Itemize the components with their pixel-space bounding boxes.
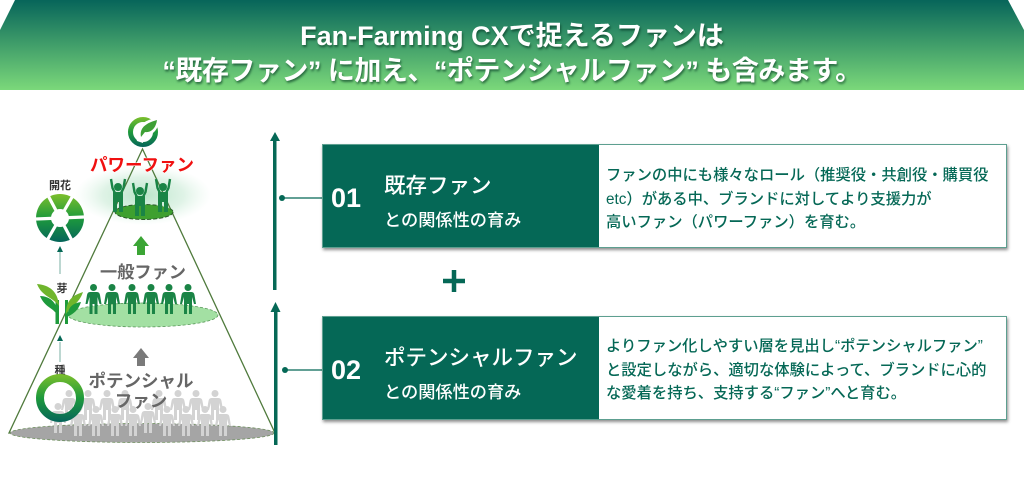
pyramid diagram	[8, 117, 322, 445]
potential fan people	[50, 390, 231, 436]
small arrow: seed to sprout	[57, 335, 63, 362]
label: potential fan: ポテンシャル	[88, 371, 194, 391]
label: bloom: 開花	[49, 178, 71, 192]
plus sign	[443, 270, 465, 292]
title: “既存ファン” に加え、“ポテンシャルファン” も含みます。	[162, 56, 862, 86]
card 02 body: と設定しながら、適切な体験によって、ブランドに心的	[606, 362, 986, 378]
power fan people	[111, 179, 170, 216]
icon: seed ring	[40, 378, 80, 418]
header banner	[0, 0, 1024, 90]
label: general fan: 一般ファン	[100, 262, 186, 282]
label: seed: 種	[54, 363, 66, 377]
glow	[75, 165, 211, 225]
card 01 body: etc）がある中、ブランドに対してより支援力が	[606, 190, 932, 208]
card 02	[322, 316, 1007, 420]
label: sprout: 芽	[56, 281, 68, 295]
card 02 heading panel	[323, 317, 599, 419]
gray arrow	[133, 348, 149, 366]
label: power fan: パワーファン	[90, 155, 194, 175]
card 02 body: よりファン化しやすい層を見出し“ポテンシャルファン”	[606, 338, 983, 355]
pyramid outline	[9, 149, 275, 433]
icon: sprout	[37, 284, 83, 324]
subheading 01: との関係性の育み	[384, 210, 521, 230]
card 01 body	[606, 166, 988, 231]
label: potential fan: ファン	[115, 391, 167, 411]
card 01 body: 高いファン（パワーファン）を育む。	[606, 214, 865, 231]
card 01 heading panel	[323, 145, 599, 247]
number 01: 01	[331, 183, 361, 213]
connector 2	[282, 367, 322, 373]
card 02 body: な愛着を持ち、支持する“ファン”へと育む。	[606, 385, 906, 402]
mid ellipse: light green	[68, 303, 218, 327]
connector 1	[279, 195, 322, 201]
heading 01: 既存ファン	[384, 174, 492, 198]
title	[162, 21, 862, 86]
general fan people	[86, 284, 196, 314]
top ellipse: green	[115, 204, 173, 220]
small arrow: sprout to bloom	[57, 246, 63, 274]
heading 02: ポテンシャルファン	[384, 346, 578, 370]
number 02: 02	[331, 355, 361, 385]
base ellipse: gray	[10, 424, 274, 442]
card 01 body: ファンの中にも様々なロール（推奨役・共創役・購買役	[606, 167, 988, 184]
axis arrow 1	[270, 132, 280, 290]
card 02 body	[606, 338, 986, 402]
axis arrow 2	[270, 302, 280, 445]
title: Fan-Farming CXで捉えるファンは	[300, 21, 724, 51]
icon: flower	[36, 194, 84, 242]
green arrow	[133, 236, 149, 255]
logo	[130, 117, 160, 144]
subheading 02: との関係性の育み	[384, 382, 521, 402]
card 01	[322, 144, 1007, 248]
